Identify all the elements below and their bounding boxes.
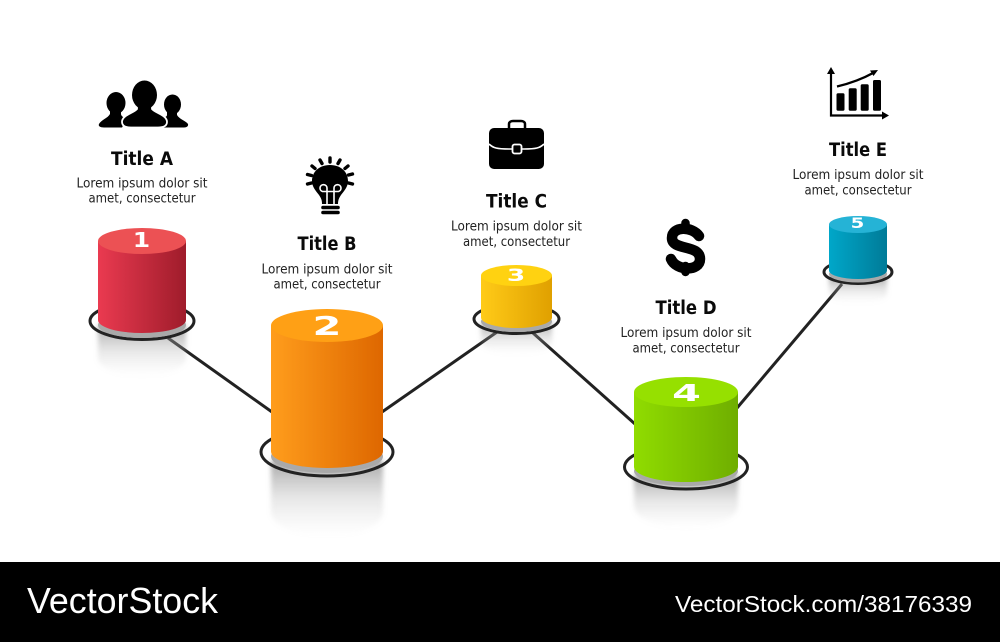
description B: Lorem ipsum dolor sit [262, 262, 392, 277]
description A [76, 176, 208, 207]
connector: cylinder 4 to 5 [737, 284, 842, 408]
icon: people [99, 80, 188, 128]
footer bar [0, 562, 1000, 642]
panel: step A [76, 80, 208, 376]
description B [262, 262, 392, 293]
title: Title C: Title C [486, 192, 547, 213]
cylinder 3 [474, 265, 559, 354]
title: Title A: Title A [111, 149, 174, 170]
panel: step C [451, 121, 582, 354]
cylinder 2 [261, 309, 393, 536]
panel: step B [261, 158, 393, 536]
connector: cylinder 3 to 4 [533, 333, 635, 424]
panel: step D [620, 223, 752, 528]
connector: cylinder 1 to 2 [168, 338, 272, 412]
description D: Lorem ipsum dolor sit [620, 326, 752, 341]
description D [620, 326, 752, 356]
description E: amet, consectetur [804, 184, 912, 198]
cylinder 1: 1 [133, 229, 150, 252]
connector: cylinder 2 to 3 [382, 332, 497, 412]
cylinder 5 [824, 216, 892, 303]
title: Title B: Title B [298, 234, 356, 255]
cylinder 4: 4 [672, 380, 701, 406]
icon: light bulb [308, 158, 352, 212]
description B: amet, consectetur [274, 278, 381, 293]
panel: step E [792, 67, 924, 303]
description E [792, 168, 924, 198]
description E: Lorem ipsum dolor sit [792, 168, 924, 183]
description C [451, 220, 582, 250]
footer url: VectorStock.com/38176339 [675, 591, 972, 617]
title: Title D: Title D [656, 298, 716, 319]
description A: amet, consectetur [88, 192, 196, 207]
icon: briefcase [489, 121, 544, 169]
description C: Lorem ipsum dolor sit [451, 220, 582, 235]
description A: Lorem ipsum dolor sit [76, 176, 208, 191]
cylinder 4 [624, 377, 748, 528]
description C: amet, consectetur [463, 235, 571, 250]
icon: dollar sign [671, 223, 700, 272]
description D: amet, consectetur [632, 342, 740, 356]
cylinder 3: 3 [507, 267, 525, 285]
icon: growth chart [827, 67, 889, 120]
cylinder 1 [90, 228, 194, 376]
cylinder 2: 2 [313, 312, 341, 342]
title: Title E: Title E [829, 140, 887, 161]
cylinder 5: 5 [851, 216, 864, 232]
footer brand: VectorStock [27, 580, 219, 621]
